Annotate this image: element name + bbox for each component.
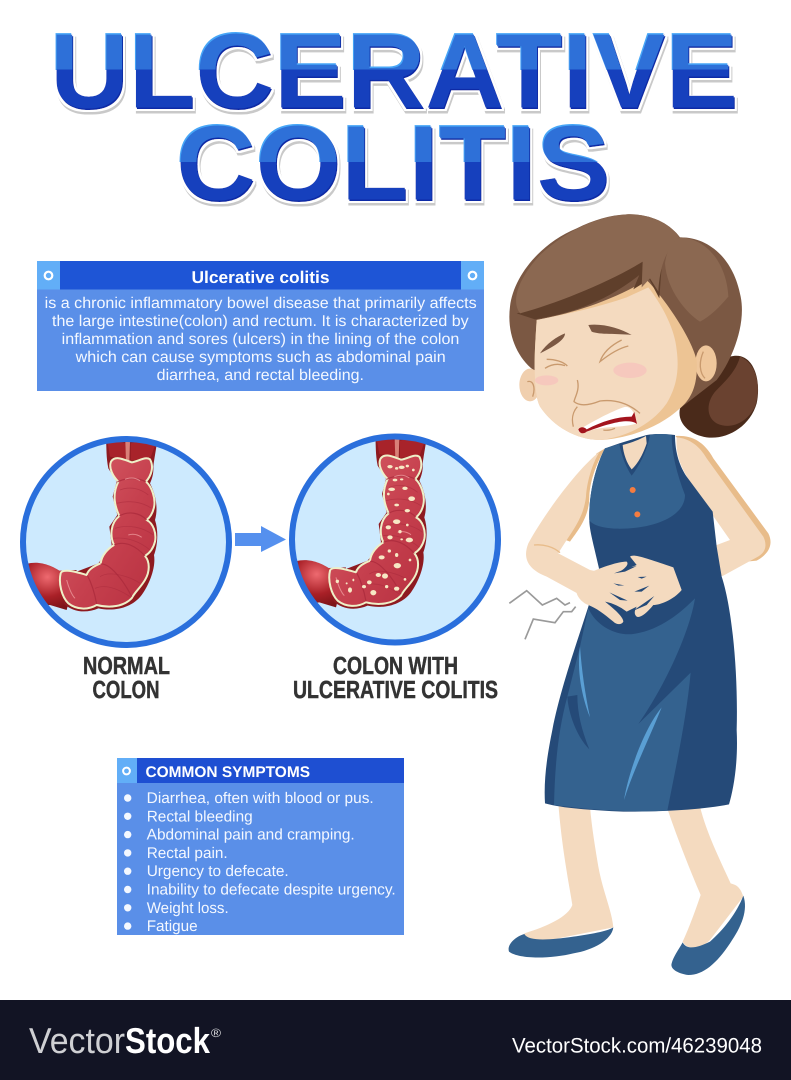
illustration: normal colon xyxy=(23,439,229,645)
definition text: the large intestine(colon) and rectum. It is characterized by xyxy=(52,313,469,330)
right arm xyxy=(670,437,765,590)
cheeks xyxy=(535,375,558,385)
label: colon with ulcerative colitis xyxy=(293,653,498,704)
logo: ® xyxy=(211,1026,221,1040)
symptoms list xyxy=(124,790,396,935)
illustration: colon with ulcerative colitis xyxy=(292,436,498,642)
ears xyxy=(519,369,541,401)
dress folds xyxy=(567,695,589,749)
arrow xyxy=(235,526,286,552)
panel: definition xyxy=(37,261,484,391)
left arm xyxy=(526,452,623,607)
label: colon with ulcerative colitis: COLON WITH xyxy=(333,653,458,680)
definition text: which can cause symptoms such as abdominal pain xyxy=(75,349,446,366)
label: colon with ulcerative colitis: ULCERATIVE COLITIS xyxy=(293,677,498,704)
symptoms list: Fatigue xyxy=(147,918,198,935)
dress xyxy=(545,434,737,812)
symptoms list: Urgency to defecate. xyxy=(147,863,289,880)
logo: Vector xyxy=(29,1020,125,1061)
legs xyxy=(524,803,613,941)
label: normal colon xyxy=(83,653,170,704)
neck xyxy=(623,436,647,469)
image id: VectorStock.com/46239048 xyxy=(512,1035,762,1058)
label: normal colon: COLON xyxy=(92,677,160,704)
logo xyxy=(29,1020,221,1061)
panel: common symptoms xyxy=(117,758,404,935)
footer xyxy=(0,1000,791,1080)
symptoms heading: COMMON SYMPTOMS xyxy=(146,764,310,781)
body xyxy=(509,434,771,975)
buttons xyxy=(630,487,636,493)
brows xyxy=(588,325,632,335)
definition text: is a chronic inflammatory bowel disease that primarily affects xyxy=(45,295,477,312)
symptoms list: Inability to defecate despite urgency. xyxy=(147,882,396,898)
shoes xyxy=(509,927,613,957)
hair bun xyxy=(679,356,758,438)
illustration: woman in pain xyxy=(509,214,771,975)
title: ULCERATIVE xyxy=(50,12,738,130)
arm shadows xyxy=(557,448,605,542)
ulcers xyxy=(336,465,415,595)
definition text: inflammation and sores (ulcers) in the lining of the colon xyxy=(62,331,459,348)
definition text xyxy=(45,295,477,384)
logo: Stock xyxy=(125,1020,211,1061)
symptoms list: Abdominal pain and cramping. xyxy=(147,827,355,844)
symptoms list: Rectal pain. xyxy=(147,845,228,862)
symptoms list: Rectal bleeding xyxy=(147,808,253,825)
title: COLITIS xyxy=(176,104,610,222)
symptoms list: Weight loss. xyxy=(147,900,229,917)
panel heading: Ulcerative colitis xyxy=(192,268,330,287)
head xyxy=(509,214,758,469)
eyes and nose xyxy=(545,340,640,430)
hair back xyxy=(509,214,742,408)
symptoms list: Diarrhea, often with blood or pus. xyxy=(147,790,374,807)
pain lines xyxy=(509,591,570,605)
definition text: diarrhea, and rectal bleeding. xyxy=(157,367,364,384)
fringe xyxy=(517,262,662,319)
face xyxy=(535,280,697,440)
hands xyxy=(577,556,682,624)
mouth xyxy=(578,407,637,433)
label: normal colon: NORMAL xyxy=(83,653,170,680)
title xyxy=(50,12,738,222)
